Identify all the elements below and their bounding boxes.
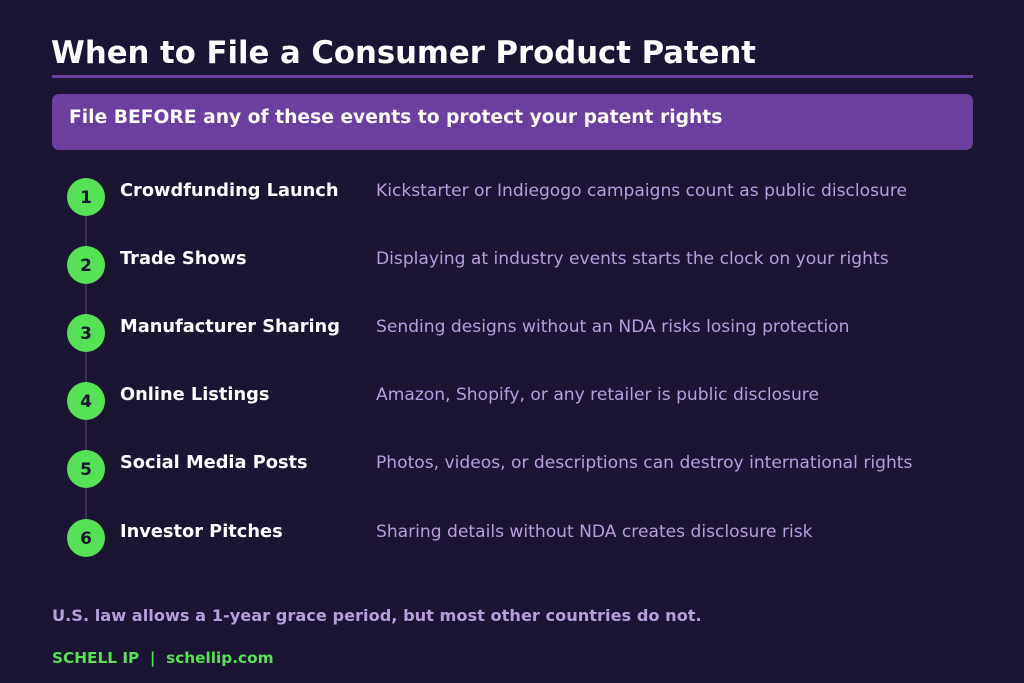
title: When to File a Consumer Product Patent bbox=[51, 36, 756, 71]
event 2: Displaying at industry events starts the clock on your rights bbox=[376, 249, 889, 269]
event 5 bbox=[67, 450, 912, 488]
banner bbox=[52, 94, 973, 150]
event 1: Crowdfunding Launch bbox=[120, 180, 338, 201]
event 4: Amazon, Shopify, or any retailer is public disclosure bbox=[376, 385, 819, 405]
event 1: Kickstarter or Indiegogo campaigns count as public disclosure bbox=[376, 181, 907, 201]
event 2: Trade Shows bbox=[120, 248, 247, 269]
event 4: 4 bbox=[80, 392, 92, 412]
event 5: Photos, videos, or descriptions can destroy international rights bbox=[376, 453, 912, 473]
banner: File BEFORE any of these events to protect your patent rights bbox=[69, 107, 722, 128]
event 6: 6 bbox=[80, 529, 92, 549]
list of events bbox=[67, 178, 912, 557]
event 4 bbox=[67, 382, 819, 420]
timeline line bbox=[85, 200, 87, 536]
event 1: 1 bbox=[80, 188, 92, 208]
event 3 bbox=[67, 314, 849, 352]
event 5: Social Media Posts bbox=[120, 452, 308, 473]
event 1 bbox=[67, 178, 907, 216]
footer note: U.S. law allows a 1-year grace period, but most other countries do not. bbox=[52, 606, 702, 625]
event 5: 5 bbox=[80, 460, 92, 480]
event 2: 2 bbox=[80, 256, 92, 276]
event 6: Investor Pitches bbox=[120, 521, 283, 542]
event 2 bbox=[67, 246, 889, 284]
event 3: Manufacturer Sharing bbox=[120, 316, 340, 337]
event 6: Sharing details without NDA creates disclosure risk bbox=[376, 522, 813, 542]
brand footer: SCHELL IP | schellip.com bbox=[52, 649, 274, 667]
event 6 bbox=[67, 519, 813, 557]
event 3: Sending designs without an NDA risks losing protection bbox=[376, 317, 849, 337]
event 3: 3 bbox=[80, 324, 92, 344]
event 4: Online Listings bbox=[120, 384, 269, 405]
